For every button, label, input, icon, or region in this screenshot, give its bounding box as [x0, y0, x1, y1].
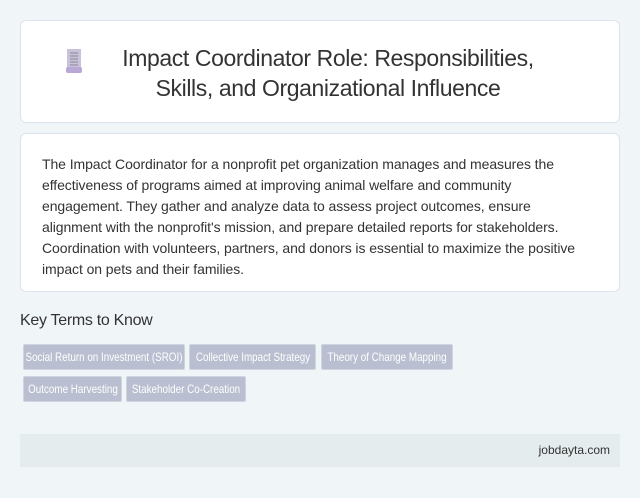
- tag 5: [126, 376, 246, 402]
- tag 1: Social Return on Investment (SROI): [26, 350, 182, 364]
- description text: impact on pets and their families.: [42, 261, 244, 277]
- description text: effectiveness of programs aimed at improving animal welfare and community: [42, 177, 511, 193]
- description text: Coordination with volunteers, partners, and donors is essential to maximize the positive: [42, 240, 575, 256]
- footer: [20, 434, 620, 467]
- tag 4: [23, 376, 122, 402]
- title: Impact Coordinator Role: Responsibilities, Skills, and Organizational Influence: [122, 45, 534, 101]
- tag 2: Collective Impact Strategy: [195, 350, 310, 364]
- tag 2: [189, 344, 316, 370]
- icon: document: [66, 49, 82, 73]
- tag 1: [23, 344, 185, 370]
- tag 3: [321, 344, 453, 370]
- heading: key terms: Key Terms to Know: [20, 312, 152, 329]
- description text: engagement. They gather and analyze data to assess project outcomes, ensure: [42, 198, 531, 214]
- footer text: jobdayta.com: [539, 443, 610, 457]
- description text: [42, 156, 575, 277]
- tag 5: Stakeholder Co-Creation: [132, 382, 240, 396]
- description text: The Impact Coordinator for a nonprofit pet organization manages and measures the: [42, 156, 554, 172]
- header card: [20, 20, 620, 123]
- tag 3: Theory of Change Mapping: [327, 350, 447, 364]
- description text: alignment with the nonprofit's mission, and prepare detailed reports for stakeholders.: [42, 219, 558, 235]
- description card: [20, 133, 620, 292]
- tag 4: Outcome Harvesting: [28, 382, 117, 396]
